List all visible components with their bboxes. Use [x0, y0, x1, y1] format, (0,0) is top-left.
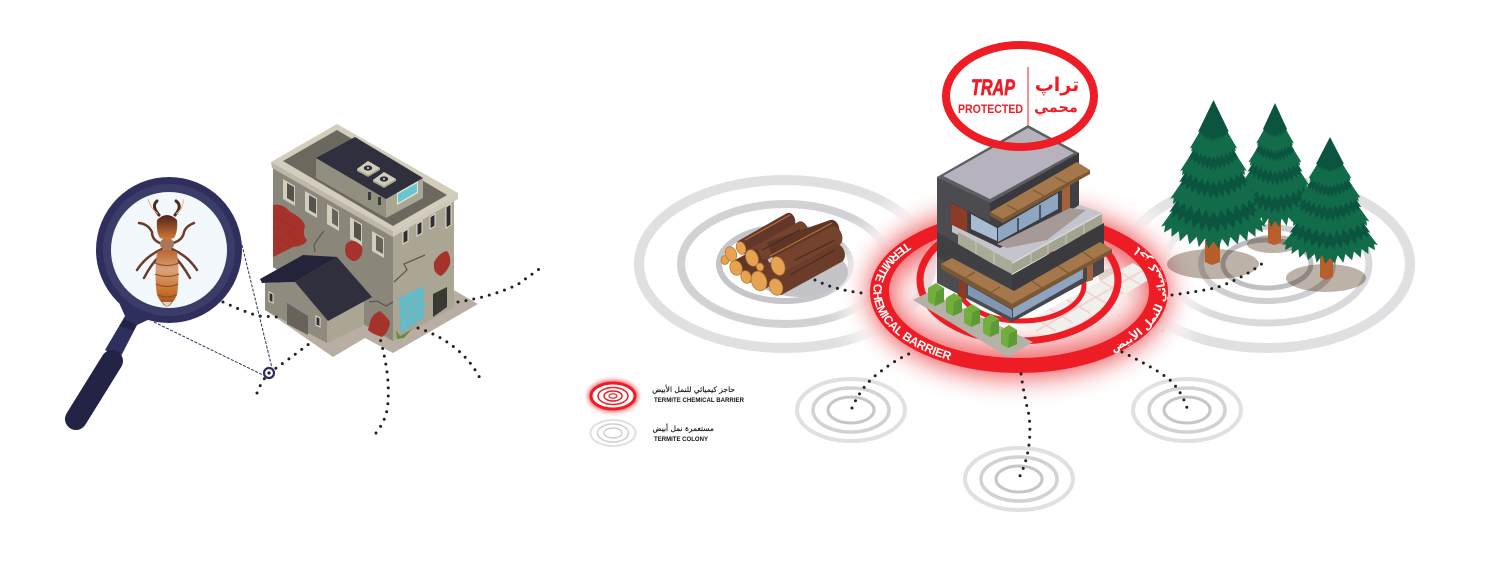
- main building walls: [273, 165, 454, 341]
- badge title Arabic: تراپ: [1035, 74, 1079, 96]
- teal glass front window: [399, 286, 424, 334]
- doorway: [433, 287, 447, 317]
- paved walkway: [1020, 263, 1155, 338]
- TRAP PROTECTED badge: [946, 45, 1094, 147]
- pine trees: [1161, 100, 1378, 280]
- legend icon: chemical barrier: [591, 383, 635, 409]
- barrier ring lettering: [873, 244, 1168, 360]
- barrier rings: [870, 211, 1168, 373]
- building roof: [271, 124, 458, 237]
- legend text: chemical barrier: حاجز كيميائي للنمل الأبيض: [652, 384, 735, 394]
- legend: [590, 383, 744, 446]
- handle: [76, 296, 152, 419]
- legend text: chemical barrier: [652, 384, 744, 404]
- barrier ring lettering: TERMITE CHEMICAL BARRIER: [873, 244, 951, 360]
- TRAP badge background: [946, 45, 1094, 147]
- colony rings: right, around trees: [1124, 180, 1410, 348]
- gravel planter bed: [913, 292, 1033, 357]
- upper floor glazing: [951, 184, 1070, 245]
- magnifying glass: [76, 177, 242, 419]
- wall cracks: [314, 231, 425, 340]
- roof slab: [937, 125, 1079, 222]
- windows on left wall: [283, 179, 384, 258]
- exposed brick patches: [273, 205, 450, 337]
- annex house: [260, 255, 372, 343]
- legend text: termite colony: مستعمرة نمل أبيض: [652, 423, 714, 433]
- legend text: termite colony: TERMITE COLONY: [654, 436, 708, 443]
- ground floor glazing: [959, 259, 1093, 318]
- pine tree middle: [1233, 103, 1317, 245]
- upper wooden pergola: [990, 162, 1090, 223]
- ground slab: [265, 282, 478, 357]
- legend text: chemical barrier: TERMITE CHEMICAL BARRIER: [654, 397, 744, 404]
- colony rings: bottom centre: [965, 448, 1073, 510]
- rooftop AC units: [357, 161, 396, 188]
- balcony and glass rails: [952, 205, 1102, 274]
- legend text: termite colony: [652, 423, 714, 443]
- badge divider: [1027, 67, 1029, 125]
- grass tuft: [396, 329, 412, 339]
- left scene: infested building: [260, 124, 478, 357]
- windows on right wall: [403, 204, 451, 244]
- log end caps: [721, 240, 787, 297]
- building shell: [937, 153, 1104, 322]
- chemical barrier glow: [877, 215, 1161, 369]
- colony rings: bottom left: [797, 379, 905, 441]
- colony rings: bottom right: [1133, 379, 1241, 441]
- log bodies: [736, 211, 847, 287]
- termite: [137, 199, 197, 307]
- badge title English: TRAP: [971, 75, 1015, 100]
- termite trails around infested building: [223, 267, 542, 433]
- lower wooden pergola: [941, 242, 1112, 309]
- badge outline: [946, 45, 1094, 147]
- pine tree right: [1282, 137, 1378, 280]
- badge subtitle English: PROTECTED: [958, 104, 1023, 116]
- lens ring: [96, 177, 242, 323]
- tree ground shadows: [1167, 235, 1366, 292]
- colony rings: left, around logs: [639, 180, 931, 348]
- log shadow: [752, 247, 848, 297]
- hedge bushes: [928, 283, 1017, 348]
- middle dark band: [937, 223, 1104, 293]
- stack of logs: [721, 211, 848, 297]
- protected modern building: [913, 125, 1112, 357]
- magnifier zoom lines and target marker: [154, 245, 274, 378]
- pine tree left: [1161, 100, 1266, 265]
- termite trails around protected building: [815, 263, 1263, 478]
- legend icon: termite colony: [590, 420, 636, 446]
- badge subtitle Arabic: محمي: [1034, 100, 1078, 116]
